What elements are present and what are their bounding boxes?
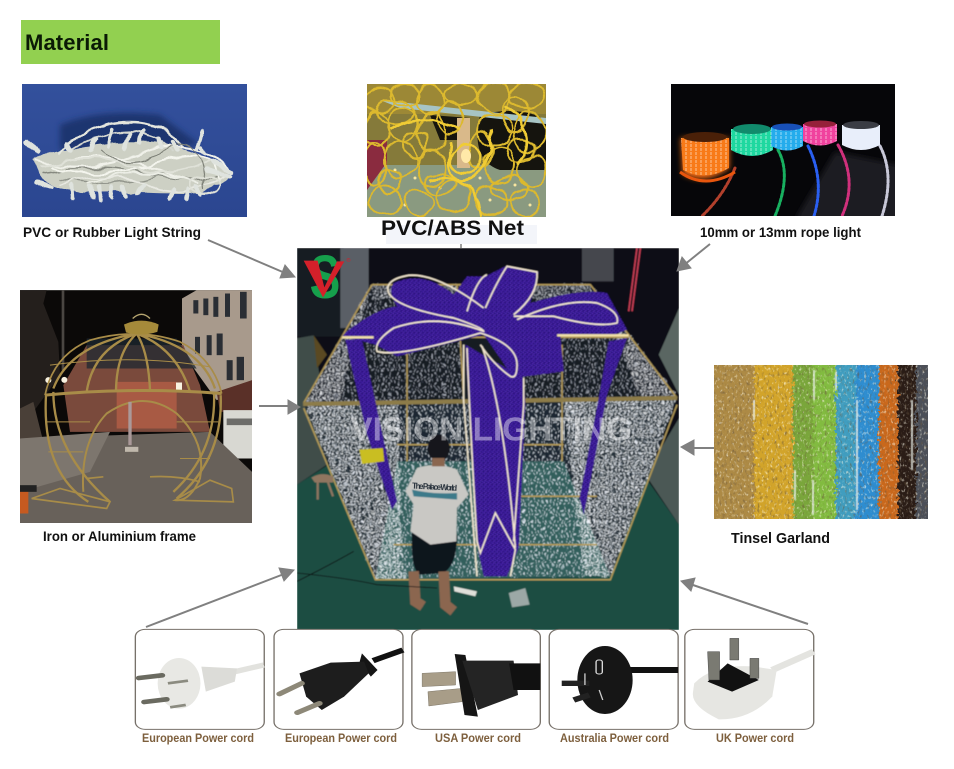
panel: PVC or rubber light string photo xyxy=(22,84,247,217)
power strip xyxy=(454,586,477,596)
person xyxy=(412,531,457,575)
watermark: VISION LIGHTING: VISION LIGHTING xyxy=(350,412,632,449)
cord labels: USA Power cord xyxy=(435,733,521,745)
arrow: UK cord to photo xyxy=(681,578,808,624)
arrow: tinsel to photo xyxy=(681,440,714,455)
panel: rope light photo xyxy=(671,84,900,220)
yellow sign xyxy=(359,448,384,464)
logo: VS: S xyxy=(310,243,340,312)
lights xyxy=(304,285,677,580)
label: PVC/ABS Net: PVC/ABS Net xyxy=(381,216,524,240)
arrow: net to photo xyxy=(460,244,462,248)
panel: PVC/ABS net photo xyxy=(364,83,546,217)
printed shirt slogan: The Palace World xyxy=(412,482,457,493)
panel: power cords row xyxy=(135,629,814,745)
card: USA power cord xyxy=(412,629,540,729)
box interior xyxy=(304,398,677,580)
cord labels: European Power cord xyxy=(285,733,397,745)
arrow: european cord to photo xyxy=(146,568,294,627)
panel: iron or aluminium frame photo xyxy=(20,290,252,523)
label: Iron or Aluminium frame: Iron or Aluminium frame xyxy=(43,528,196,544)
label backing strip xyxy=(386,225,537,244)
central ribbon xyxy=(465,345,525,576)
card: European power cord, black xyxy=(274,629,403,729)
card: UK power cord xyxy=(685,629,814,729)
title: Material xyxy=(21,20,220,64)
label: 10mm or 13mm rope light: 10mm or 13mm rope light xyxy=(700,224,861,240)
side ribbons xyxy=(345,340,397,510)
cord labels: Australia Power cord xyxy=(560,733,669,745)
logo: VS: ® xyxy=(346,257,351,264)
reels xyxy=(680,120,880,181)
arrow: frame to photo xyxy=(259,400,300,414)
bow xyxy=(342,266,627,378)
cord labels: UK Power cord xyxy=(716,733,794,745)
photo scene xyxy=(297,248,679,630)
cord labels xyxy=(142,733,794,745)
title: Material: Material xyxy=(25,30,109,55)
arrow: rope light to photo xyxy=(677,244,710,271)
panel: central gift box photo xyxy=(297,243,679,630)
label: PVC or Rubber Light String: PVC or Rubber Light String xyxy=(23,224,201,240)
panel: tinsel garland photo xyxy=(705,360,936,525)
cord labels: European Power cord xyxy=(142,733,254,745)
arrow: light string to photo xyxy=(208,240,295,278)
label: Tinsel Garland: Tinsel Garland xyxy=(731,530,830,547)
card: European power cord, white xyxy=(135,629,264,729)
gold frame xyxy=(304,285,677,580)
stool xyxy=(313,475,333,500)
card: Australia power cord xyxy=(549,629,678,729)
